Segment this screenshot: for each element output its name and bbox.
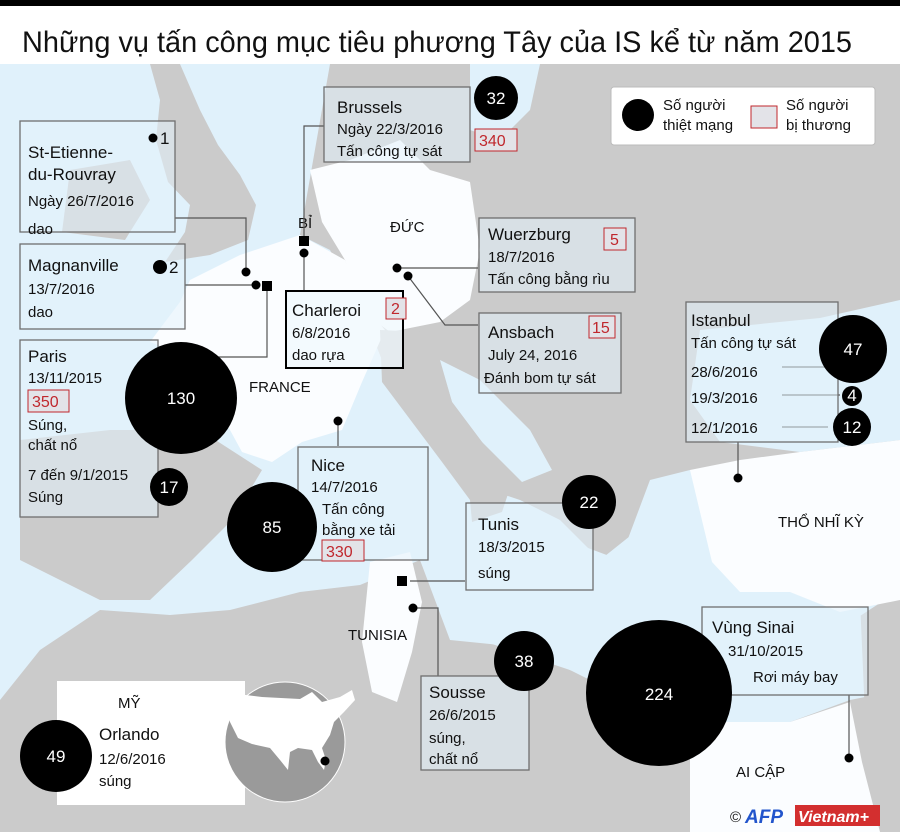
location markers (242, 236, 854, 762)
box: Nice: 330 (326, 544, 353, 561)
box: Sousse: Sousse (429, 683, 486, 702)
box: Nice: Nice (311, 456, 345, 475)
circle: Sinai 224 (586, 620, 732, 766)
circle: Brussels 32 (474, 76, 518, 120)
inset: USA (57, 681, 355, 805)
box: Paris: 13/11/2015 (28, 370, 102, 387)
box: Magnanville (20, 244, 185, 329)
inset: USA: súng (99, 773, 132, 790)
country labels: THỔ NHĨ KỲ (778, 513, 864, 531)
box: Sousse: 26/6/2015 (429, 707, 496, 724)
box: Istanbul: 12/1/2016 (691, 420, 758, 437)
box: Magnanville: 13/7/2016 (28, 281, 95, 298)
inset: USA: MỸ (118, 695, 140, 712)
box: Istanbul (686, 302, 838, 442)
box: Istanbul: Istanbul (691, 311, 751, 330)
box: Nice: Tấn công (322, 501, 385, 518)
box: Ansbach: 15 (592, 320, 610, 337)
box: Sinai (702, 607, 868, 695)
box: Brussels: 340 (479, 133, 506, 150)
circle: Nice 85: 85 (263, 518, 281, 537)
box: Wuerzburg: Wuerzburg (488, 225, 571, 244)
box: Ansbach: Ansbach (488, 323, 554, 342)
logo: AFP Vietnam+: AFP (744, 807, 783, 828)
box: Sousse (421, 676, 529, 770)
box: Sousse: súng, (429, 730, 466, 747)
box: Sousse: chất nổ (429, 751, 478, 768)
country labels: AI CẬP (736, 764, 785, 781)
inset: USA: 12/6/2016 (99, 751, 166, 768)
box: Tunis: Tunis (478, 515, 519, 534)
box: Tunis: 18/3/2015 (478, 539, 545, 556)
circle: Istanbul 47 (819, 315, 887, 383)
box: St-Etienne: Ngày 26/7/2016 (28, 193, 134, 210)
legend: thiệt mạng (663, 117, 733, 134)
circle: Orlando 49 (20, 720, 92, 792)
circle: Orlando 49: 49 (47, 747, 65, 766)
box: Brussels: Tấn công tự sát (337, 143, 443, 160)
box: Paris (20, 340, 158, 517)
box: Wuerzburg: Tấn công bằng rìu (488, 271, 610, 288)
box: Brussels: Ngày 22/3/2016 (337, 121, 443, 138)
box: Charleroi: Charleroi (292, 301, 361, 320)
box: Istanbul: 28/6/2016 (691, 364, 758, 381)
logo: AFP Vietnam+: Vietnam+ (798, 809, 869, 826)
circle: Sousse 38: 38 (515, 652, 533, 671)
box: Wuerzburg (479, 218, 635, 292)
box: St-Etienne: St-Etienne- (28, 143, 113, 162)
box: Wuerzburg: 5 (610, 232, 619, 249)
circle: Paris 130 (125, 342, 237, 454)
box: Charleroi (286, 291, 406, 368)
box: Tunis: súng (478, 565, 511, 582)
box: Brussels (324, 87, 517, 162)
box: Nice: bằng xe tải (322, 522, 395, 539)
legend: Số người (786, 97, 848, 114)
box: St-Etienne (20, 121, 175, 238)
legend (611, 87, 875, 145)
box: Magnanville: dao (28, 304, 53, 321)
box: Sinai: 31/10/2015 (728, 643, 803, 660)
box: St-Etienne: du-Rouvray (28, 165, 116, 184)
circle: Istanbul 4 (842, 386, 862, 406)
circle: Brussels 32: 32 (487, 89, 505, 108)
box: Istanbul: 19/3/2016 (691, 390, 758, 407)
circle: Tunis 22: 22 (580, 493, 598, 512)
circle: Sinai 224: 224 (645, 685, 673, 704)
box: Nice (298, 447, 428, 561)
title: Những vụ tấn công mục tiêu phương Tây của IS kể từ năm 2015 (22, 26, 852, 59)
country labels: FRANCE (249, 379, 311, 396)
box: Magnanville: 2 (169, 258, 178, 277)
box: Paris: 350 (32, 394, 59, 411)
top bar (0, 0, 900, 6)
box: Ansbach: Đánh bom tự sát (484, 370, 597, 387)
box: Charleroi: 6/8/2016 (292, 325, 350, 342)
circle: Paris 17: 17 (160, 478, 178, 497)
country labels: ĐỨC (390, 219, 425, 236)
country labels: BỈ (298, 215, 312, 232)
legend: Số người (663, 97, 725, 114)
box: Paris: Paris (28, 347, 67, 366)
box: Tunis (466, 503, 593, 590)
circle: Nice 85 (227, 482, 317, 572)
legend: bị thương (786, 117, 851, 134)
box: Charleroi: dao rựa (292, 347, 345, 364)
box: Magnanville: Magnanville (28, 256, 119, 275)
box: St-Etienne: 1 (160, 129, 169, 148)
box: Brussels: Brussels (337, 98, 402, 117)
country labels (249, 215, 864, 781)
circle: Sousse 38 (494, 631, 554, 691)
box: Nice: 14/7/2016 (311, 479, 378, 496)
circle: Istanbul 12 (833, 408, 871, 446)
connector lines (175, 126, 849, 761)
logo: AFP Vietnam+: © (730, 809, 741, 826)
circle: Paris 17 (150, 468, 188, 506)
box: Paris: chất nổ (28, 437, 77, 454)
circle: Tunis 22 (562, 475, 616, 529)
box: Paris: Súng, (28, 417, 67, 434)
box: Sinai: Vùng Sinai (712, 618, 794, 637)
logo: AFP Vietnam+ (730, 805, 880, 828)
box: Wuerzburg: 18/7/2016 (488, 249, 555, 266)
box: Paris: 7 đến 9/1/2015 (28, 467, 128, 484)
box: Sinai: Rơi máy bay (753, 669, 838, 686)
box: Paris: Súng (28, 489, 63, 506)
box: Ansbach: July 24, 2016 (488, 347, 577, 364)
circle: Istanbul 12: 12 (843, 418, 861, 437)
circle: Istanbul 4: 4 (847, 386, 857, 405)
circle: Istanbul 47: 47 (844, 340, 862, 359)
box: Charleroi: 2 (391, 301, 400, 318)
box: St-Etienne: dao (28, 221, 53, 238)
inset: USA: Orlando (99, 725, 159, 744)
box: Ansbach (479, 313, 621, 393)
circle: Paris 130: 130 (167, 389, 195, 408)
box: Istanbul: Tấn công tự sát (691, 335, 797, 352)
country labels: TUNISIA (348, 627, 407, 644)
